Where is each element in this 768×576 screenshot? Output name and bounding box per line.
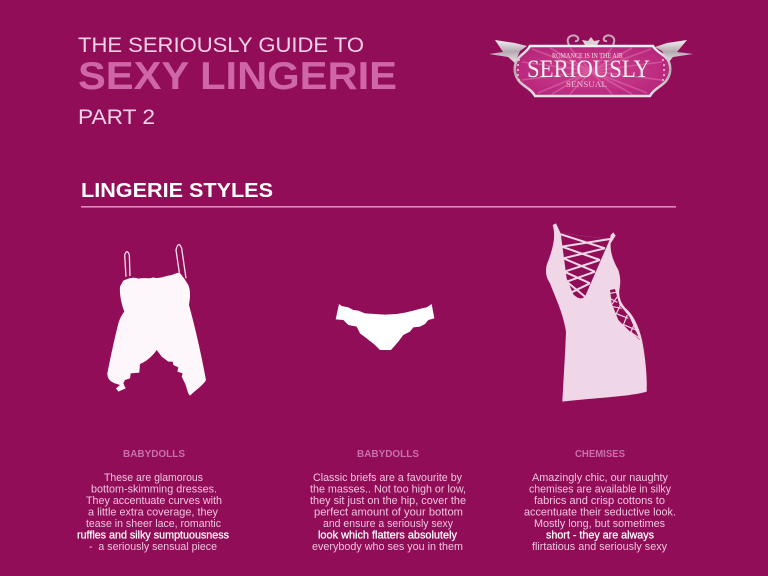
logo: seriously sensual badge — [489, 35, 693, 96]
back lacing criss-cross — [561, 234, 610, 297]
top ornament — [568, 35, 614, 47]
column 3 body text: fabrics and crisp cottons to — [534, 495, 665, 507]
column 3 body text: chemises are available in silky — [529, 484, 672, 496]
column 1 body text: They accentuate curves with — [86, 495, 222, 507]
left ribbon wing — [489, 40, 527, 63]
column 2 body text: everybody who ses you in them — [312, 541, 463, 553]
column 2 heading: BABYDOLLS — [357, 449, 419, 460]
badge rays — [522, 48, 662, 94]
column 3 body text: flirtatious and seriously sexy — [532, 541, 668, 553]
column 2 body text: they sit just on the hip, cover the — [310, 495, 466, 507]
column 2 body text: look which flatters absolutely — [318, 530, 458, 542]
column 1 body text: - a seriously sensual piece — [89, 541, 217, 553]
column 1 body text: a little extra coverage, they — [88, 506, 219, 518]
side lacing opening — [610, 289, 640, 340]
column 1 body text: These are glamorous — [104, 472, 204, 484]
logo tagline: ROMANCE IS IN THE AIR — [552, 52, 623, 60]
badge dots — [517, 59, 665, 81]
column 2 body text — [310, 472, 466, 553]
badge plate — [515, 46, 670, 96]
column 1 body text: bottom-skimming dresses. — [91, 484, 217, 496]
title line: the seriously guide to: THE SERIOUSLY GUIDE TO — [78, 34, 364, 57]
column 3 heading: CHEMISES — [575, 449, 625, 460]
right ribbon wing — [655, 40, 693, 63]
column 3 body text: accentuate their seductive look. — [524, 506, 676, 518]
logo sub-word: SENSUAL — [566, 80, 607, 89]
column 2 body text: the masses.. Not too high or low, — [310, 484, 466, 496]
column 3 body text: short - they are always — [546, 530, 655, 542]
icon: babydoll silhouette — [107, 245, 206, 396]
column 3 body text: Mostly long, but sometimes — [534, 518, 666, 530]
column 2 body text: perfect amount of your bottom — [314, 506, 463, 518]
icon: briefs silhouette — [336, 304, 434, 350]
column 2: babydolls (briefs) — [310, 449, 466, 553]
column 1 body text: ruffles and silky sumptuousness — [77, 530, 230, 542]
heading: lingerie styles: LINGERIE STYLES — [81, 180, 273, 202]
back lacing opening — [561, 233, 610, 298]
column 2 body text: Classic briefs are a favourite by — [313, 472, 463, 484]
title: sexy lingerie: SEXY LINGERIE — [78, 55, 397, 98]
logo wordmark: SERIOUSLY — [527, 56, 650, 83]
column 3: chemises — [524, 449, 676, 553]
column 1: babydolls — [77, 449, 230, 553]
column 3 body text: Amazingly chic, our naughty — [532, 472, 669, 484]
side lacing criss-cross — [610, 292, 641, 339]
column 1 heading: BABYDOLLS — [123, 449, 185, 460]
column 1 body text: tease in sheer lace, romantic — [86, 518, 222, 530]
heading rule — [81, 206, 676, 208]
subtitle: part 2: PART 2 — [78, 106, 155, 129]
icon: chemise silhouette — [546, 223, 647, 402]
column 2 body text: and ensure a seriously sexy — [323, 518, 454, 530]
column 1 body text — [77, 472, 230, 553]
title block — [78, 34, 397, 129]
column 3 body text — [524, 472, 676, 553]
